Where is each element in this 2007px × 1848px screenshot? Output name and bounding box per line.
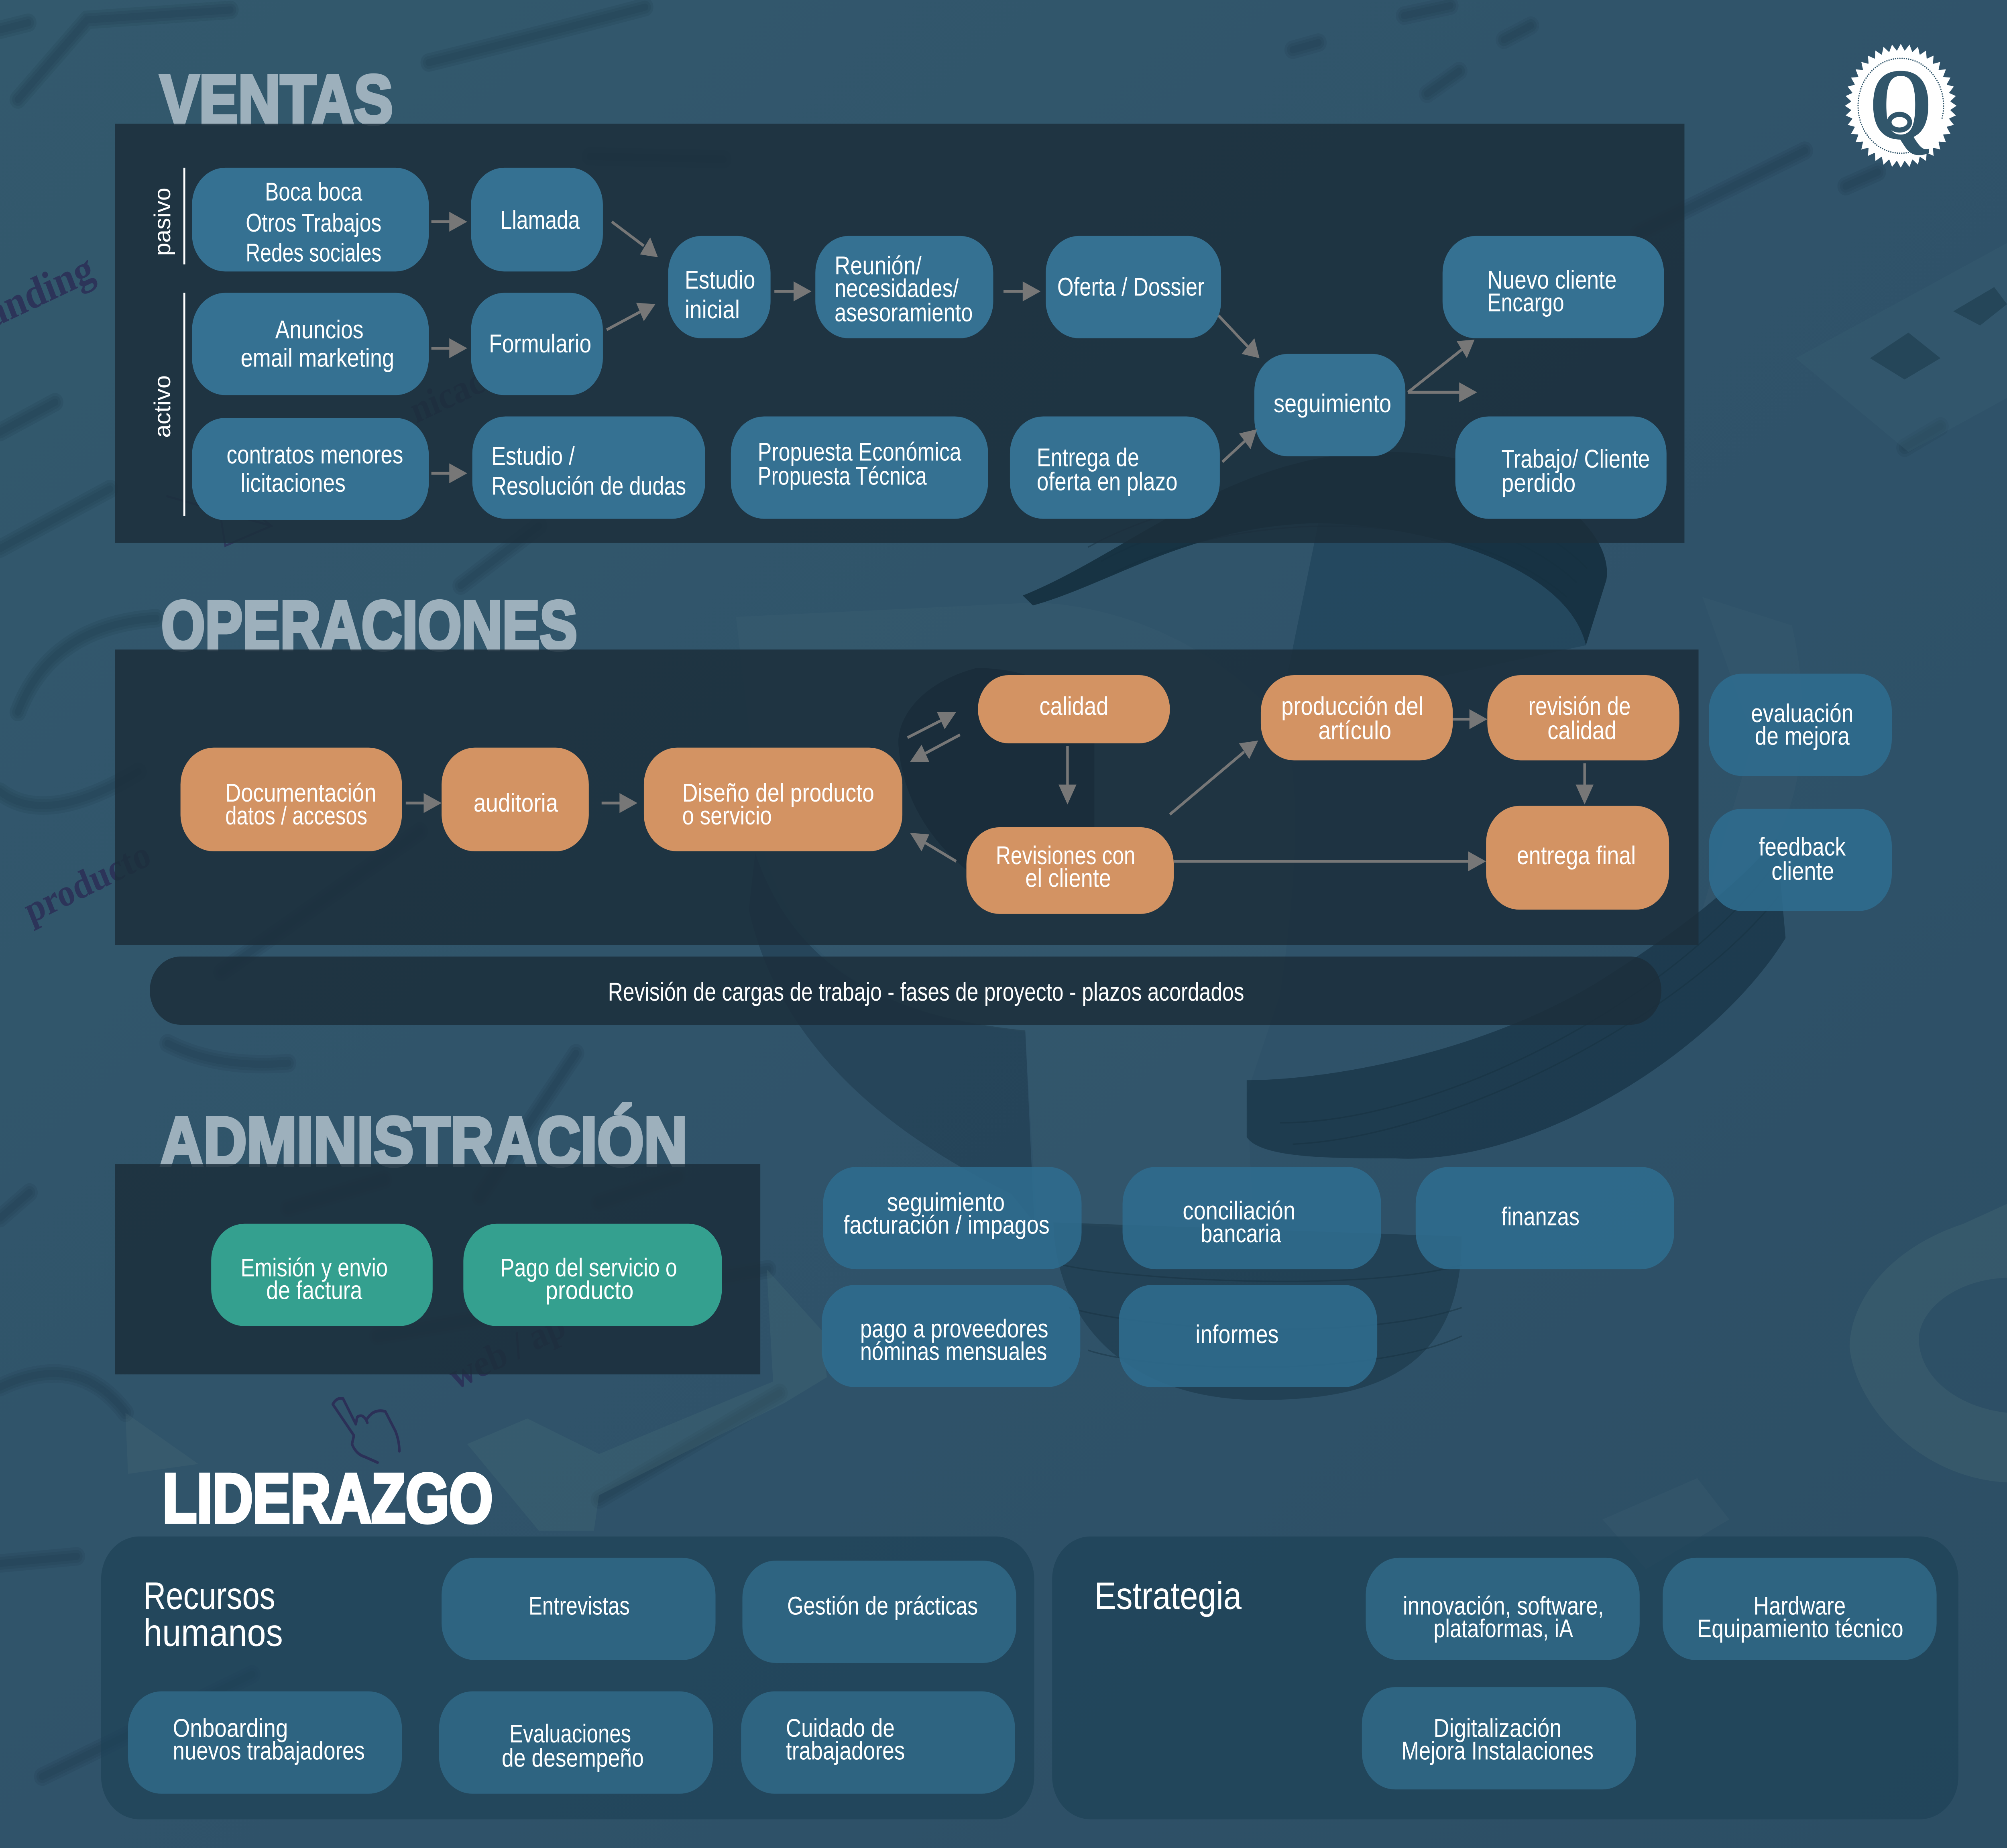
box: Boca boca: Redes sociales [246,238,381,267]
box: Diseno [644,748,902,851]
box: Boca boca: Otros Trabajos [246,208,381,237]
box: Anuncios: email marketing [240,344,394,372]
box: Gestion de practicas: Gestión de prácticas [787,1592,978,1620]
box: calidad: calidad [1039,692,1108,720]
box: Digitalizacion: Mejora Instalaciones [1402,1736,1594,1765]
logo: Q [1869,47,1932,161]
bar: revision de cargas: Revisión de cargas de trabajo - fases de proyecto - plazos acordados [608,977,1244,1006]
box: Evaluaciones: Evaluaciones [509,1719,631,1748]
box: Nuevo cliente: Nuevo cliente [1487,265,1616,294]
box: Emision: de factura [266,1276,362,1305]
box: Nuevo cliente: Encargo [1487,288,1564,317]
icon: hand cursor [333,1398,399,1463]
box: Pago [463,1224,722,1326]
box: Reunion [815,236,993,338]
box: produccion [1261,675,1453,760]
box: evaluacion de mejora: de mejora [1755,722,1850,750]
box: seguimiento facturacion: facturación / impagos [843,1211,1050,1239]
box: feedback cliente: feedback [1759,832,1846,861]
box: Documentacion: datos / accesos [225,801,367,830]
box: Cuidado: Cuidado de [786,1714,895,1742]
box: Trabajo / Cliente perdido: Trabajo/ Cliente [1501,444,1650,473]
box: Estudio inicial: inicial [685,295,740,324]
box: seguimiento facturacion: seguimiento [887,1188,1005,1217]
box: innovacion [1366,1558,1640,1660]
background photo: producto [18,832,156,932]
background photo: web / ap [443,1303,571,1398]
box: Hardware: Hardware [1754,1592,1846,1620]
box: Gestion de practicas [742,1561,1016,1663]
box: Onboarding: nuevos trabajadores [173,1736,365,1765]
box: conciliacion [1123,1167,1381,1269]
box: Llamada: Llamada [501,206,580,234]
box: auditoria: auditoria [474,788,558,817]
box: Estudio / Resolucion: Estudio / [491,442,575,470]
box: finanzas: finanzas [1501,1202,1580,1231]
box: Entrega de oferta: oferta en plazo [1037,467,1178,496]
box: Entrevistas [442,1558,716,1660]
box: Reunion: asesoramiento [835,298,973,327]
panel: administracion [115,1164,760,1374]
box: Digitalizacion [1362,1687,1636,1789]
box: entrega final [1486,806,1669,910]
box: Estudio inicial [668,236,771,338]
box: pago a proveedores [822,1285,1080,1387]
title: Administracion: ADMINISTRACIÓN [160,1103,687,1180]
box: Evaluaciones: de desempeño [502,1744,644,1772]
box: Oferta / Dossier [1046,236,1221,338]
box: auditoria [442,748,589,851]
box: Anuncios: Anuncios [275,315,364,344]
heading: Recursos humanos: humanos [143,1612,283,1654]
box: Trabajo / Cliente perdido [1455,417,1667,519]
box: Entrega de oferta [1010,417,1220,519]
box: Boca boca [192,168,429,271]
box: Revisiones: el cliente [1025,864,1111,892]
bar: revision de cargas [150,957,1661,1025]
box: Estudio / Resolucion [472,417,705,519]
box: contratos menores: contratos menores [226,440,403,469]
box: Entrevistas: Entrevistas [529,1592,630,1620]
box: Boca boca: Boca boca [265,177,362,206]
box: Onboarding: Onboarding [173,1714,288,1742]
box: revision de calidad: calidad [1547,716,1616,745]
box: Diseno: Diseño del producto [682,778,874,807]
panel: operaciones [115,649,1699,945]
box: Estudio inicial: Estudio [685,265,755,294]
box: calidad [978,675,1170,743]
box: contratos menores [192,418,429,520]
box: seguimiento facturacion [823,1167,1082,1269]
box: pago a proveedores: pago a proveedores [860,1314,1048,1343]
box: evaluacion de mejora: evaluación [1751,699,1853,727]
arrows: ventas [432,212,1477,483]
label: pasivo: pasivo [149,187,175,256]
heading: Estrategia: Estrategia [1094,1575,1242,1617]
title: Ventas: VENTAS [160,61,393,138]
box: Cuidado [741,1691,1015,1794]
arrows: operaciones [406,709,1594,871]
box: seguimiento [1254,354,1405,456]
box: finanzas [1416,1167,1674,1269]
box: Documentacion [181,748,402,851]
box: entrega final: entrega final [1517,841,1636,870]
box: Propuesta [731,417,988,519]
panel: ventas [115,124,1684,543]
box: Documentacion: Documentación [225,778,377,807]
heading: Recursos humanos: Recursos [143,1575,275,1617]
box: Propuesta: Propuesta Técnica [758,462,927,490]
box: produccion: producción del [1281,692,1423,720]
box: Formulario: Formulario [489,329,591,358]
box: Hardware: Equipamiento técnico [1697,1614,1903,1643]
box: conciliacion: bancaria [1201,1219,1281,1248]
box: Emision [211,1224,433,1326]
box: Propuesta: Propuesta Económica [758,437,961,466]
box: Entrega de oferta: Entrega de [1037,443,1139,472]
box: Hardware [1663,1558,1937,1660]
heading: Recursos humanos [143,1575,283,1654]
box: informes: informes [1195,1320,1279,1349]
box: Reunion: necesidades/ [835,274,959,303]
panel: estrategia [1052,1537,1958,1819]
box: Nuevo cliente [1443,236,1664,338]
box: Revisiones [967,827,1174,914]
box: Oferta / Dossier: Oferta / Dossier [1057,273,1205,301]
background photo: nicac [404,359,490,431]
logo [1823,19,1979,192]
box: seguimiento: seguimiento [1274,389,1391,418]
box: conciliacion: conciliación [1183,1196,1295,1225]
box: Cuidado: trabajadores [786,1736,905,1765]
box: Evaluaciones [439,1691,713,1794]
box: evaluacion de mejora [1709,674,1892,776]
title: Liderazgo: LIDERAZGO [163,1459,493,1537]
box: Pago: Pago del servicio o [501,1253,677,1282]
box: revision de calidad: revisión de [1528,692,1630,720]
box: Emision: Emisión y envio [240,1253,388,1282]
box: Estudio / Resolucion: Resolución de dudas [491,471,686,500]
box: Onboarding [128,1691,402,1794]
box: Digitalizacion: Digitalización [1433,1714,1561,1742]
box: Llamada [471,168,603,271]
title: Operaciones: OPERACIONES [161,587,577,664]
label: activo: activo [149,375,175,438]
box: Formulario [471,293,603,395]
box: revision de calidad [1487,675,1679,760]
box: produccion: artículo [1318,716,1391,745]
box: Trabajo / Cliente perdido: perdido [1501,468,1575,497]
box: feedback cliente [1709,809,1892,911]
panel: recursos humanos [101,1537,1034,1819]
box: Diseno: o servicio [682,801,772,830]
box: Revisiones: Revisiones con [996,841,1135,870]
box: informes [1119,1285,1377,1387]
box: pago a proveedores: nóminas mensuales [860,1337,1047,1366]
box: innovacion: plataformas, iA [1433,1614,1573,1643]
box: Reunion: Reunión/ [835,251,922,280]
box: contratos menores: licitaciones [240,468,346,497]
box: innovacion: innovación, software, [1403,1592,1604,1620]
box: feedback cliente: cliente [1771,857,1834,885]
box: Anuncios [192,293,429,395]
box: Pago: producto [545,1276,633,1305]
